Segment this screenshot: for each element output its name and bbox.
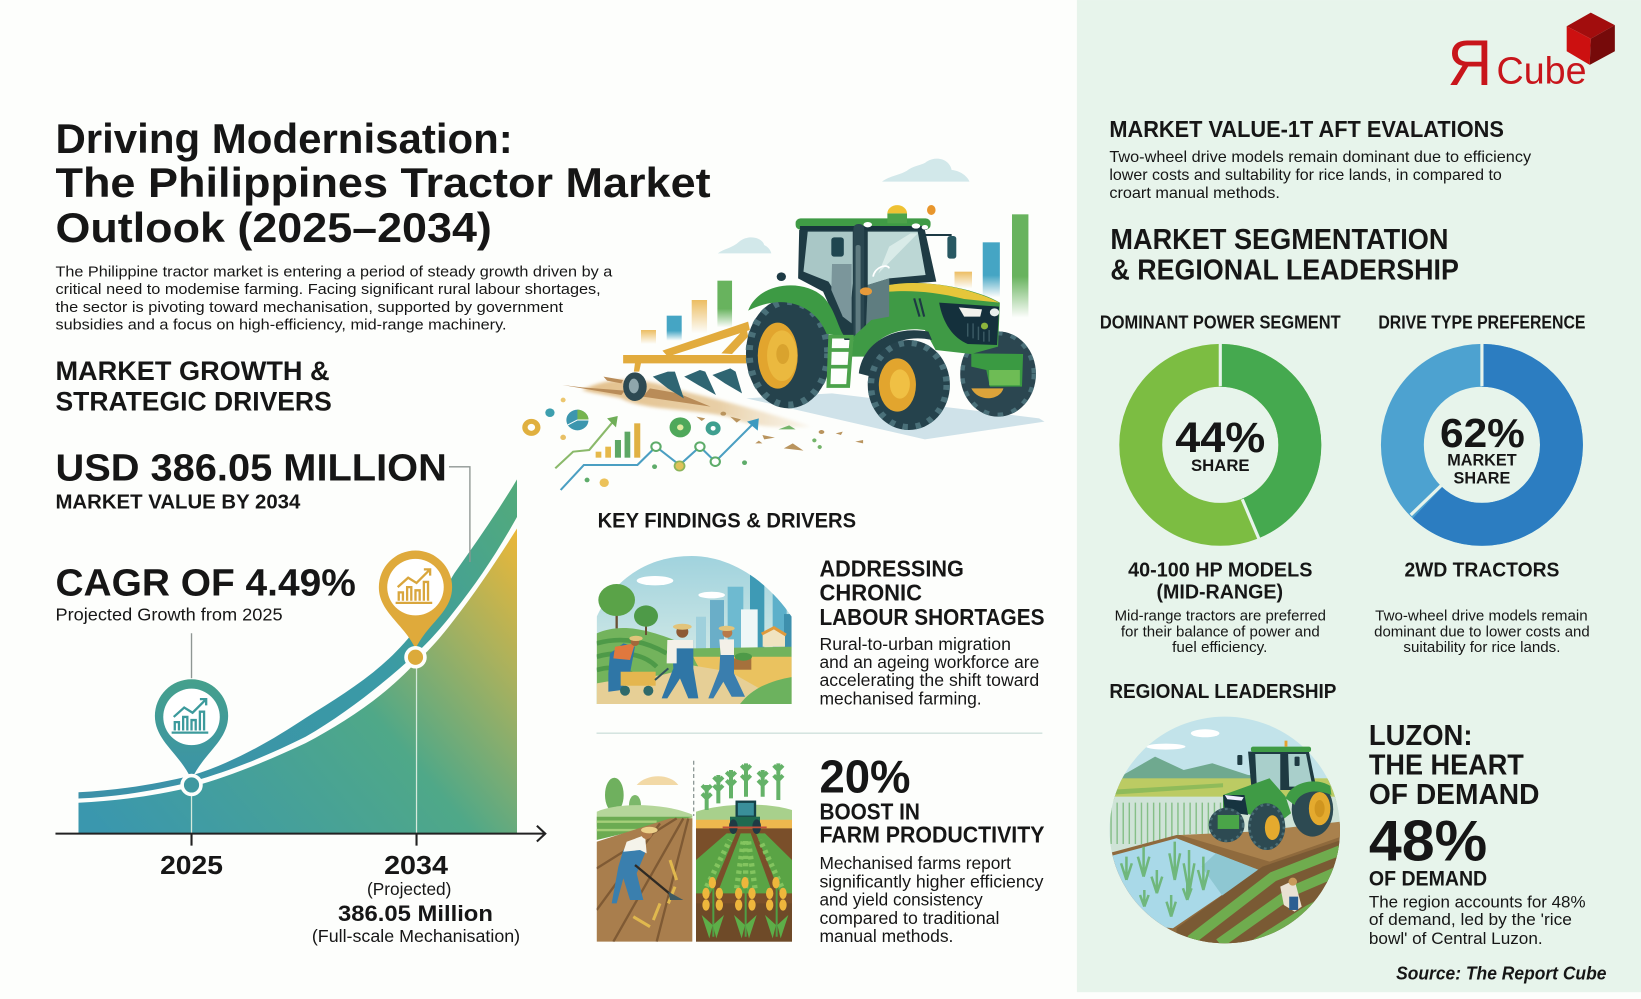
leader lines [192,467,470,678]
chart: market growth curve [55,467,545,946]
tractor small [723,802,767,834]
heading: market growth and strategic drivers: MARKET GROWTH & [55,355,330,386]
heading: Luzon the heart of demand [1369,719,1539,810]
label: of demand: OF DEMAND [1369,867,1487,890]
icon: pie [566,410,588,430]
icon: gold ring [525,421,538,433]
illustration: Luzon rice fields and tractor [1109,713,1341,947]
worker with cart [608,636,668,696]
text block: farm productivity [819,750,1045,946]
text block: addressing labour shortages: and an ageing workforce are [819,652,1039,672]
illustration: manual versus mechanised farming [597,761,792,942]
text block: introduction: critical need to modemise farming. Facing significant rural labour shortages, [55,281,601,298]
text block: mid-range description [1115,608,1326,656]
far front wheel [960,331,1036,417]
stat: USD 386.05 million: USD 386.05 MILLION [55,446,447,488]
ground shadow [746,393,1044,439]
text block: 2WD description [1374,608,1590,656]
divider [692,761,696,816]
label: 2WD tractors: 2WD TRACTORS [1404,560,1559,582]
soil [582,380,811,427]
text block: region description [1369,892,1586,948]
text block: addressing labour shortages: Rural-to-urban migration [819,634,1011,654]
donut chart: 62% market share [1402,343,1561,524]
illustration: tractor with plough and rising bars [525,159,1044,490]
scattered dots [545,398,822,487]
text block: farm productivity: FARM PRODUCTIVITY [819,822,1045,848]
crops [702,763,783,810]
manual side [597,776,693,942]
text block: farm productivity: BOOST IN [819,798,920,824]
donut chart: 44% share: 44% [1175,414,1265,462]
rear wheel [746,298,831,408]
label: 40-100 HP models [1128,560,1312,604]
text block: addressing labour shortages [819,556,1044,708]
hood and body [852,283,1023,387]
text block: market value description: Two-wheel drive models remain dominant due to efficiency [1109,149,1531,166]
source note: Source: The Report Cube [1396,963,1606,984]
label: 2034 projection: (Projected) [367,879,451,899]
clouds [882,159,970,182]
label: 2034 projection: 2034 [384,850,448,880]
label: 2034 projection [312,850,520,946]
heading: market segmentation: & REGIONAL LEADERSHIP [1110,253,1459,285]
text block: region description: of demand, led by the 'rice [1369,910,1572,929]
text block: addressing labour shortages: ADDRESSING [819,556,964,582]
text block: region description: The region accounts for 48% [1369,892,1586,911]
title: Driving Modernisation: [55,115,513,162]
area under curve [78,529,517,833]
text block: 2WD description: Two-wheel drive models remain [1375,608,1588,625]
text block: mid-range description: fuel efficiency. [1172,639,1267,656]
label: 40-100 HP models: (MID-RANGE) [1156,582,1283,604]
heading: market segmentation [1110,223,1459,285]
donut chart: 44% share [1141,343,1300,539]
text block: region description: bowl' of Central Luzon. [1369,929,1543,948]
x axis [55,826,545,846]
text block: 2WD description: dominant due to lower costs and [1374,623,1590,640]
donut chart: 62% market share: MARKET [1447,452,1517,470]
text block: market value description [1109,149,1531,202]
donut chart: 44% share: SHARE [1191,456,1250,475]
text block: addressing labour shortages: accelerating the shift toward [819,670,1039,690]
text block: farm productivity: manual methods. [819,926,953,946]
title [55,115,711,251]
text block: addressing labour shortages: mechanised farming. [819,688,982,708]
worker walking [662,624,698,698]
text block: 2WD description: suitability for rice lands. [1403,639,1560,656]
logo: RCube: Я [1447,26,1492,99]
text block: mid-range description: for their balance of power and [1121,623,1320,640]
heading: market growth and strategic drivers [55,355,332,416]
text block: market value description: croart manual methods. [1109,185,1280,202]
cab [777,205,956,341]
mini chart: blue arrow line [561,418,759,490]
text block: addressing labour shortages: CHRONIC [819,580,922,606]
stat: CAGR of 4.49%: CAGR OF 4.49% [55,562,356,604]
text block: introduction: subsidies and a focus on high-efficiency, mid-range machinery. [55,317,507,334]
title: Outlook (2025–2034) [55,204,492,251]
text block: introduction [55,263,613,334]
title: The Philippines Tractor Market [55,159,711,206]
text block: farm productivity: compared to traditional [819,908,999,928]
worker with basket [708,626,752,698]
mechanised side [696,805,792,942]
text block: market value description: lower costs and sultability for rice lands, in compared to [1109,167,1502,184]
heading: Luzon the heart of demand: LUZON: [1369,719,1473,751]
steps [828,337,852,386]
stat: 48%: 48% [1369,809,1487,873]
text block: introduction: the sector is pivoting toward mechanisation, supported by government [55,299,564,316]
text block: addressing labour shortages: LABOUR SHORTAGES [819,604,1044,630]
donut chart: 62% market share: SHARE [1454,470,1510,488]
heading: key findings and drivers: KEY FINDINGS & DRIVERS [598,509,856,532]
rear fender [748,285,845,337]
heading: Luzon the heart of demand: THE HEART [1369,748,1524,780]
text block: farm productivity: significantly higher efficiency [819,872,1044,892]
text block: mid-range description: Mid-range tractors are preferred [1115,608,1326,625]
logo: RCube [1447,13,1615,99]
heading: market segmentation: MARKET SEGMENTATION [1110,223,1448,255]
plough [623,322,750,401]
front wheel [859,330,950,430]
growth band [78,479,517,799]
text block: introduction: The Philippine tractor market is entering a period of steady growth driven by a [55,263,613,280]
label: 40-100 HP models: 40-100 HP MODELS [1128,560,1312,582]
label: projected growth: Projected Growth from 2025 [55,605,283,625]
panel: right market segmentation [1077,0,1641,992]
heading: market value: MARKET VALUE-1T AFT EVALATIONS [1109,116,1504,142]
text block: farm productivity: Mechanised farms report [819,853,1011,873]
illustration: farm labourers and city skyline [597,553,793,707]
rising bars [641,330,656,344]
label: 2034 projection: 386.05 Million [338,901,493,926]
label: market value by 2034: MARKET VALUE BY 2034 [55,492,300,514]
marker: 2034 pin [379,551,452,667]
label: 2034 projection: (Full-scale Mechanisation) [312,926,520,946]
heading: drive type preference: DRIVE TYPE PREFERENCE [1378,312,1586,333]
heading: Luzon the heart of demand: OF DEMAND [1369,778,1539,810]
donut chart: 62% market share: 62% [1440,410,1525,456]
heading: market growth and strategic drivers: STRATEGIC DRIVERS [55,385,332,416]
marker: 2025 pin [155,679,228,794]
text block: farm productivity: and yield consistency [819,889,983,909]
heading: dominant power segment: DOMINANT POWER SEGMENT [1100,312,1341,333]
label: 2025: 2025 [160,850,223,880]
heading: regional leadership: REGIONAL LEADERSHIP [1109,681,1336,703]
text block: farm productivity: 20% [819,750,911,802]
mini chart: green arrow and bars [555,416,640,468]
logo: RCube: Cube [1497,50,1587,92]
